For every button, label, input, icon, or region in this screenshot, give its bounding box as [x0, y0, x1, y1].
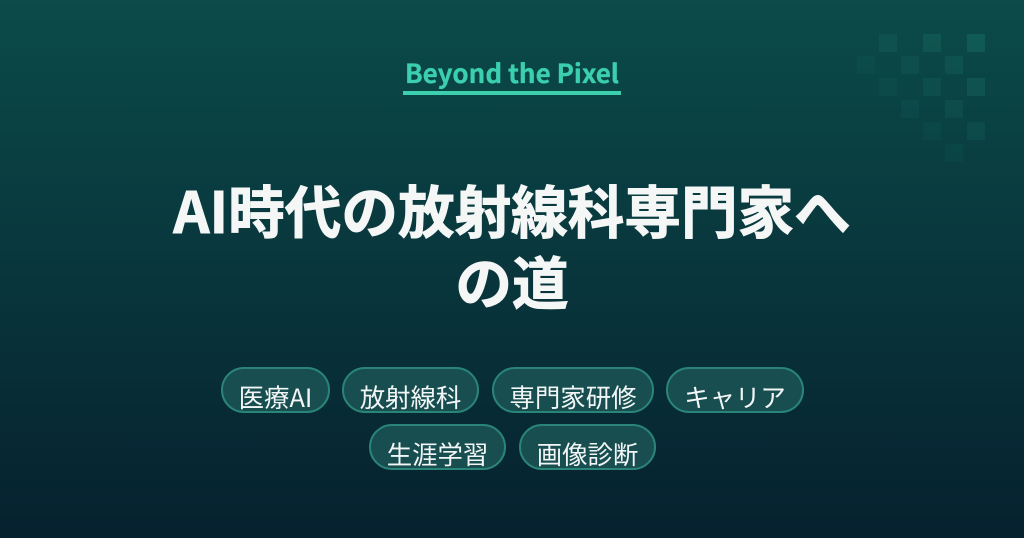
title: の道	[455, 239, 569, 321]
eyebrow label: Beyond the Pixel: Beyond the Pixel	[405, 54, 619, 91]
tag row	[221, 367, 804, 472]
tag: 生涯学習: 生涯学習	[387, 436, 488, 472]
tag: 専門家研修	[492, 367, 654, 413]
tag: キャリア: キャリア	[684, 379, 786, 415]
tag: 医療AI	[221, 367, 330, 413]
tag: 放射線科	[342, 367, 479, 413]
title	[172, 168, 851, 321]
tag: 放射線科: 放射線科	[360, 379, 461, 415]
tag: 専門家研修: 専門家研修	[510, 379, 636, 415]
tag: 画像診断	[519, 424, 656, 470]
tag: 生涯学習	[369, 424, 506, 470]
tag: キャリア	[666, 367, 804, 413]
tag: 画像診断: 画像診断	[537, 436, 638, 472]
title: AI時代の放射線科専門家へ	[173, 168, 851, 250]
tag: 医療AI: 医療AI	[239, 379, 312, 415]
decorative pixel grid	[879, 34, 985, 140]
